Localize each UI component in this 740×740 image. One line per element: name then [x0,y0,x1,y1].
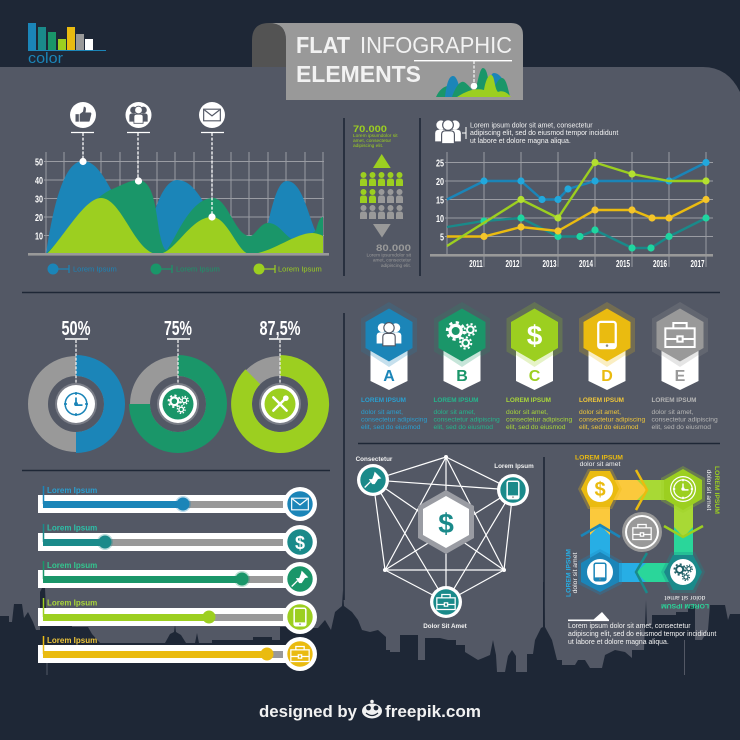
hexagon option E: E [675,368,686,385]
section dividers [22,118,720,620]
hexagon option E [652,302,708,390]
hexagon option B [434,302,490,390]
hexagon option A [361,302,417,390]
footer credit: freepik.com [385,702,481,721]
option text E: consectetur adipiscing [652,416,718,424]
hexagon option A: A [383,368,395,385]
network diagram: $ [438,508,454,539]
option text D [579,397,645,431]
line chart [430,152,713,270]
cycle diagram [566,454,720,609]
icon: thumbs up [70,102,96,128]
y-axis labels: 20 [35,213,43,224]
cycle centre: briefcase [622,512,662,552]
line chart labels: 20 [436,177,444,188]
people stat column: amet, consectetur [353,138,392,144]
icon: people [126,102,152,128]
progress bar: lime: Lorem Ipsum [47,598,97,608]
cycle label: lime: dolor sit amet [705,470,712,511]
title banner: INFOGRAPHIC [360,32,512,58]
option text C: elit, sed do eiusmod [506,424,566,431]
hexagon option D: D [601,368,613,385]
donut: 87,5% [231,318,329,453]
option text A: consectetur adipiscing [361,416,427,424]
cycle note [568,612,716,646]
option text A: elit, sed do eiusmod [361,424,421,431]
logo: color bars [28,23,106,67]
option text E: LOREM IPSUM [652,397,697,404]
cycle node: dollar [578,469,622,509]
node: tablet [494,463,534,506]
footer credit: designed by [259,702,358,721]
cycle label: blue [566,549,579,597]
cycle label: green: LOREM IPSUM [661,602,709,609]
icon: mail [199,102,225,128]
footer credit [259,700,481,721]
y-axis labels: 30 [35,194,43,206]
hexagon option C: $ [527,320,543,351]
y-axis labels: 10 [35,232,43,242]
cycle node: dollar: $ [594,479,606,501]
line chart header: adipiscing elit, sed do eiusmod tempor incididunt [470,130,618,137]
progress bar: blue [38,486,317,521]
option text A: LOREM IPSUM [361,397,406,404]
logo: color bars: color [28,50,63,67]
people stat column: 70.000 [353,124,387,135]
chart legend: Lorem Ipsum [278,264,322,274]
option text D: LOREM IPSUM [579,397,624,404]
lime area [47,198,323,254]
option text D: elit, sed do eiusmod [579,424,639,431]
line chart header: Lorem ipsum dolor sit amet, consectetur [470,122,593,130]
progress bar: yellow: Lorem Ipsum [47,636,97,645]
cycle note: Lorem ipsum dolor sit amet, consectetur [568,623,691,630]
hexagon option C [506,302,562,390]
node: pin [356,456,393,496]
line: teal series [447,214,710,252]
cycle label: lime: LOREM IPSUM [713,466,720,514]
progress bar: yellow [38,636,317,671]
donut: 87,5%: 87,5% [260,318,301,340]
line chart: 2016 [653,259,667,270]
cycle label: blue: dolor sit amet [572,552,579,593]
people stat column: amet, consectetur [373,258,411,264]
green area [46,180,323,254]
line chart: 2014 [579,259,593,270]
hexagon option C: C [529,368,541,385]
progress bar: teal: $ [295,533,305,553]
progress bar: green: Lorem Ipsum [47,561,97,570]
option text C: consectetur adipiscing [506,416,572,424]
y-axis labels: 40 [35,176,43,187]
people stat column: Lorem ipsumdolor sit [366,252,412,258]
cycle note: ut labore et dolore magna aliqua. [568,639,669,646]
cycle node: gears [661,552,705,593]
cycle label: green: dolor sit amet [664,594,705,601]
cycle label: yellow [575,454,623,468]
line chart labels: 15 [436,196,444,206]
line chart labels: 25 [436,158,444,170]
option text B: LOREM IPSUM [434,397,479,404]
progress bar: lime [38,598,317,634]
line chart labels: 10 [436,214,444,225]
cycle label: yellow: dolor sit amet [580,461,621,468]
people stat column: Lorem ipsumdolor sit [353,133,398,139]
node: tablet: Lorem Ipsum [494,463,534,470]
cycle note: adipiscing elit, sed do eiusmod tempor incididunt [568,631,716,638]
cycle label: yellow: LOREM IPSUM [575,454,623,462]
chart callouts [70,102,225,221]
progress bar: blue: Lorem Ipsum [47,486,97,495]
chart legend: Lorem Ipsum [73,264,117,274]
option text C [506,397,572,431]
line chart: 2011 [469,259,483,270]
people stat column: adipiscing elit. [353,143,383,149]
line: lime series [447,159,710,246]
donut: 50%: 50% [62,318,91,340]
hexagon option B: B [456,368,468,385]
city skyline [0,582,740,740]
node: briefcase [423,586,468,630]
option text C: dolor sit amet, [506,409,548,416]
option text B [434,397,500,431]
cycle node: clock [661,466,705,513]
people stat column: adipiscing elit. [381,263,411,269]
hexagon option D [579,302,635,390]
option text D: consectetur adipiscing [579,416,645,424]
line: yellow series [447,196,710,240]
title banner [252,23,523,100]
line: blue series [447,159,710,203]
line chart labels: 5 [440,232,444,244]
network diagram [356,455,534,630]
option text D: dolor sit amet, [579,409,621,416]
cycle node: phone [578,549,622,595]
cycle label: blue: LOREM IPSUM [566,549,572,597]
progress bar: teal [38,524,317,559]
area chart [28,152,329,256]
icon: freepik mascot [362,700,382,718]
option text A: dolor sit amet, [361,409,403,416]
line chart: 2012 [506,259,520,270]
cycle label: lime [705,466,720,514]
line chart header [435,120,618,145]
option text B: consectetur adipiscing [434,416,500,424]
y-axis labels [35,158,43,242]
node: pin: Consectetur [356,456,393,463]
y-axis labels: 50 [35,158,43,168]
chart legend [48,264,322,274]
title banner: ELEMENTS [296,61,421,87]
option text B: elit, sed do eiusmod [434,424,493,431]
line chart header: ut labore et dolore magna aliqua. [470,138,571,145]
option text E: dolor sit amet, [652,409,694,416]
line chart: 2015 [616,259,630,270]
option text C: LOREM IPSUM [506,397,551,404]
people stat column: 80.000 [376,243,411,254]
donut: 75% [129,318,227,453]
donut: 50% [38,318,125,453]
chart legend: Lorem Ipsum [176,264,220,274]
option text E [652,397,718,431]
donut: 75%: 75% [164,318,192,340]
progress bar: teal: Lorem Ipsum [47,524,97,532]
line chart labels [436,158,444,244]
option text E: elit, sed do eiusmod [652,424,711,431]
node: briefcase: Dolor Sit Amet [423,623,468,630]
blue area [46,161,316,254]
title banner: FLAT [296,32,350,58]
line chart: 2017 [690,259,705,270]
progress bar: green [38,561,317,596]
option text B: dolor sit amet, [434,409,476,416]
people stat column [353,124,412,269]
cycle label: green [661,594,709,609]
option text A [361,397,427,431]
line chart: 2013 [542,259,557,270]
